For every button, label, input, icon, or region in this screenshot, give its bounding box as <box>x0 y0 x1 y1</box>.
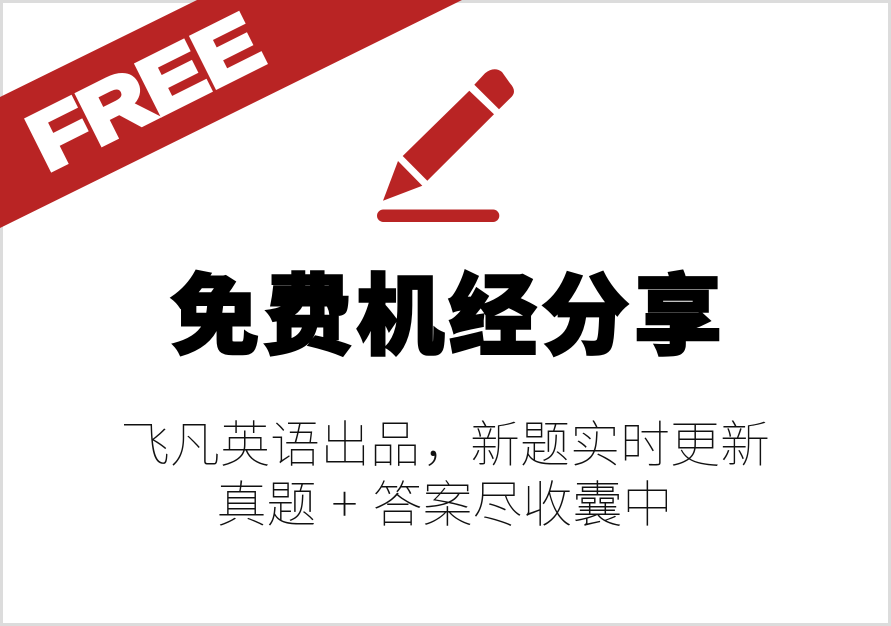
subtitle line 1: 飞凡英语出品，新题实时更新 <box>120 405 770 477</box>
icon: pencil <box>377 69 514 222</box>
title: 免费机经分享 <box>171 267 727 366</box>
FREE ribbon: FREE <box>15 0 275 187</box>
subtitle line 2: 真题 + 答案尽收囊中 <box>216 465 673 537</box>
